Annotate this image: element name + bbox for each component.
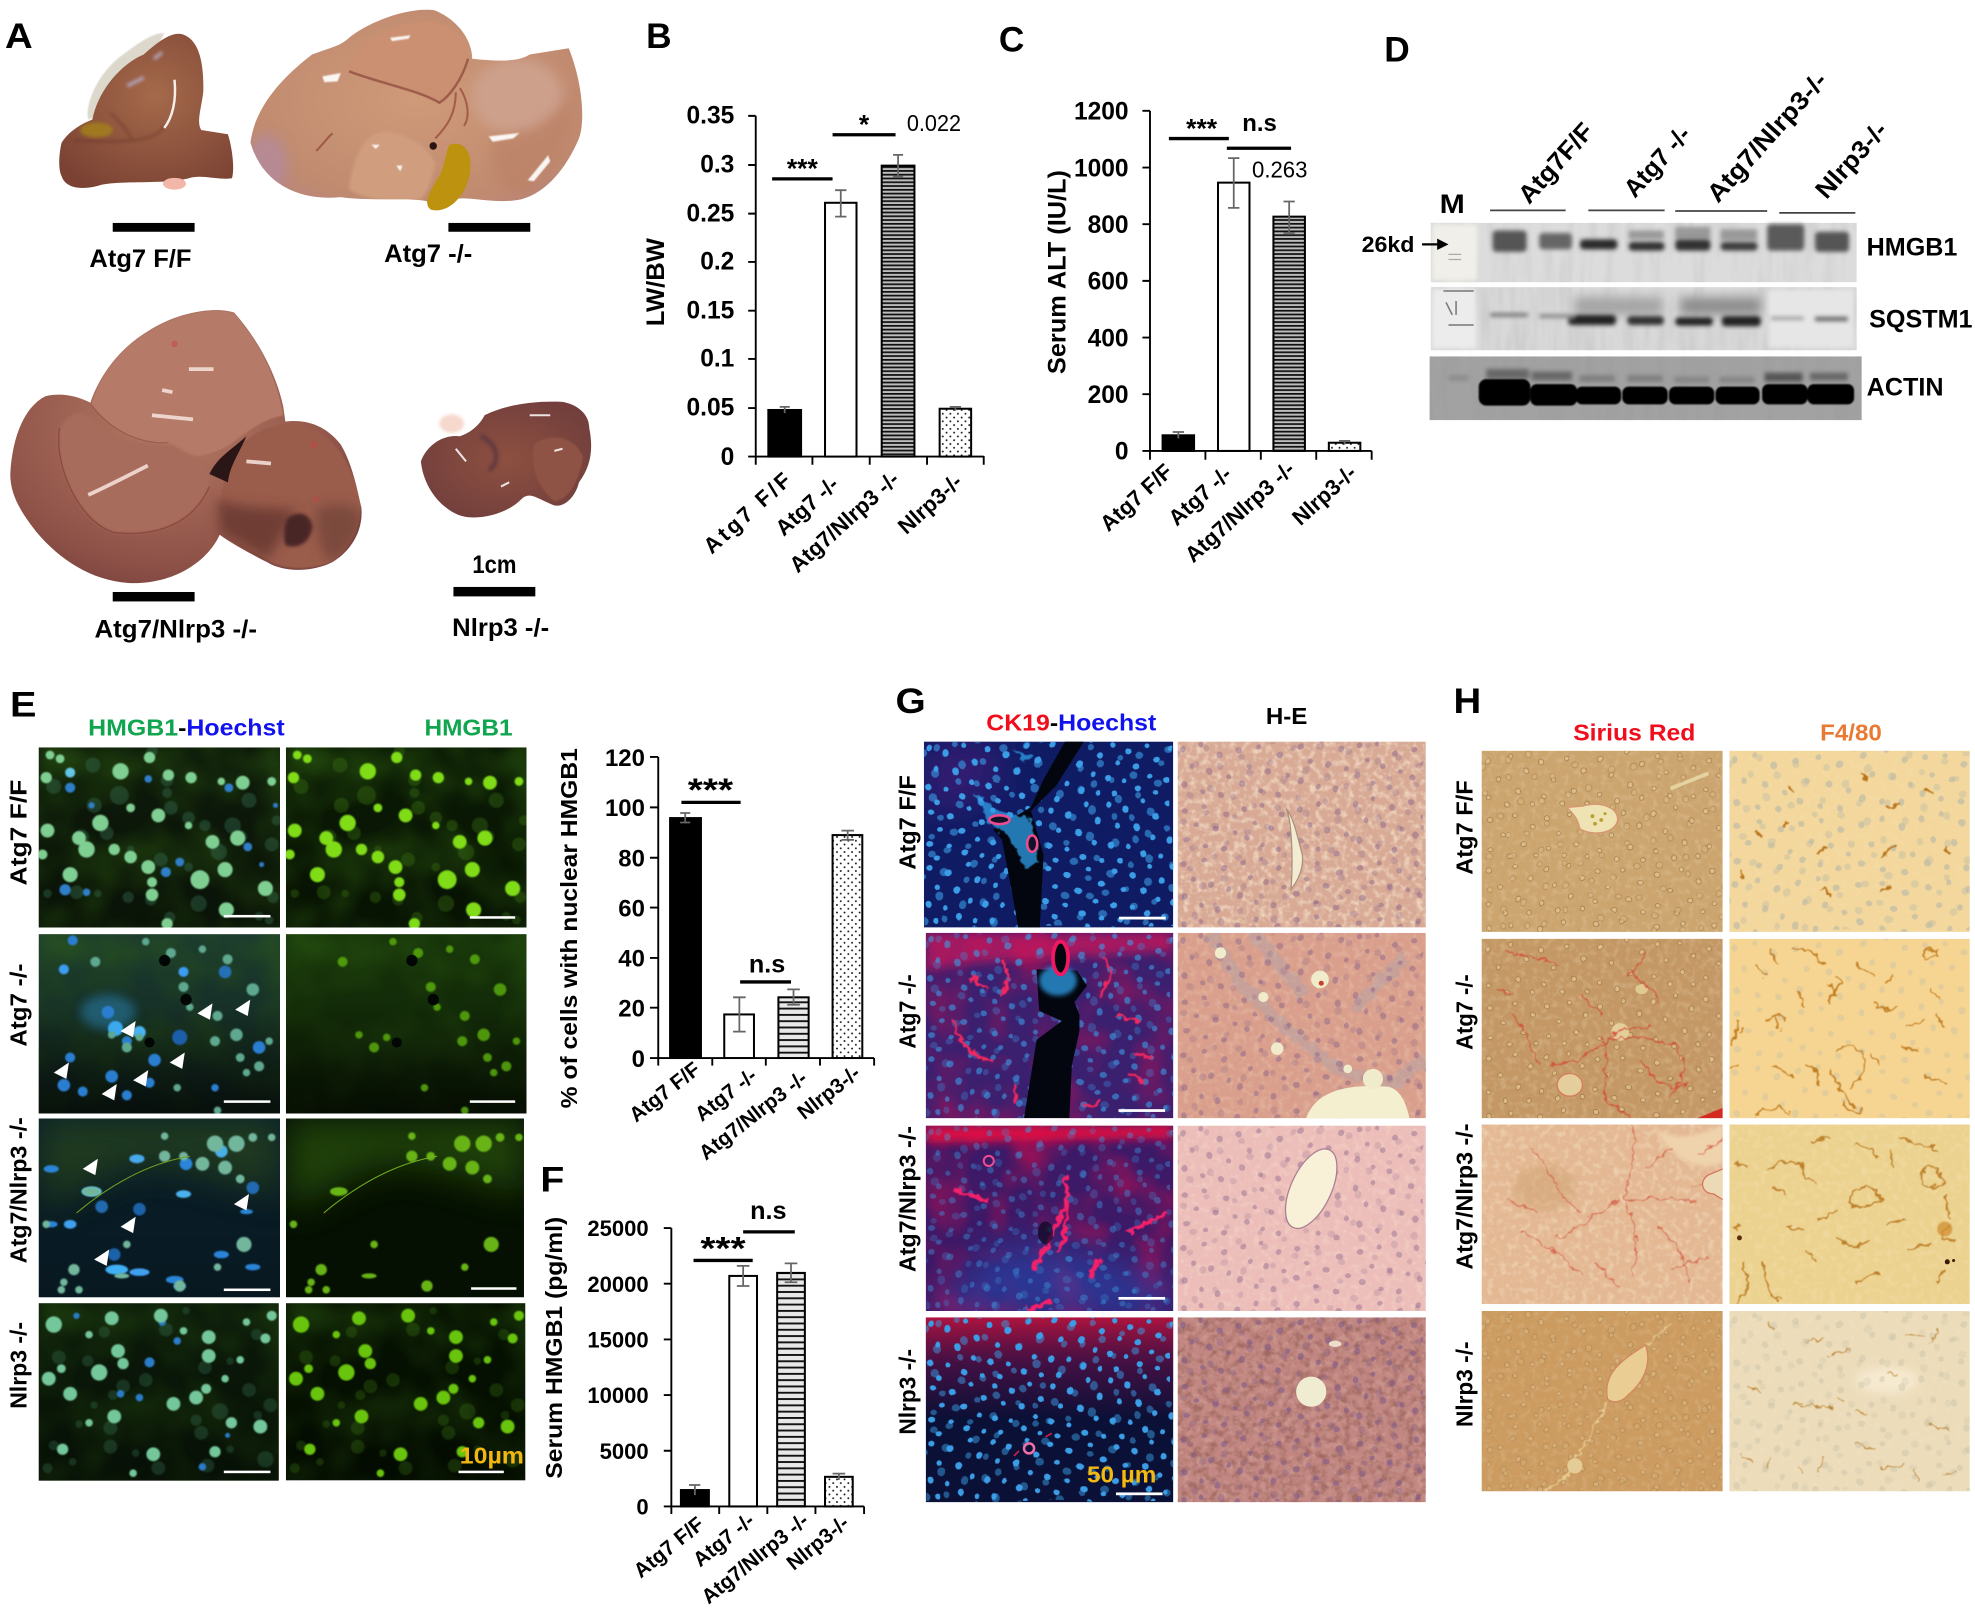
axes (748, 116, 984, 465)
y-axis tick labels: 100 (605, 795, 645, 822)
row labels: Nlrp3 -/- (1451, 1341, 1477, 1427)
blot protein labels (1867, 235, 1972, 401)
panel label E: E (10, 686, 37, 725)
y-axis tick labels: 120 (605, 745, 645, 772)
y-axis tick labels: 10000 (587, 1383, 649, 1408)
row labels: Atg7/Nlrp3 -/- (1451, 1124, 1477, 1270)
axes (650, 757, 874, 1066)
micrograph: F4/80 Atg7/Nlrp3 -/- (1730, 1124, 1970, 1304)
micrograph: green Nlrp3 -/- with scale (286, 1303, 526, 1480)
micrograph: H-E Atg7 -/- (1178, 932, 1426, 1118)
liver photo: Nlrp3 -/- (421, 402, 591, 518)
micrograph: F4/80 Atg7 F/F (1729, 750, 1970, 932)
panel F: Serum HMGB1 bar chart (540, 1161, 864, 1609)
scale bars and labels for bottom row: Nlrp3 -/- (452, 614, 549, 642)
blot: ACTIN (1430, 356, 1862, 420)
y-axis tick labels: 0 (721, 444, 734, 471)
column heading green: HMGB1 (424, 715, 513, 741)
y-axis tick labels: 0 (636, 1495, 649, 1520)
micrograph: F4/80 Atg7 -/- (1730, 938, 1970, 1118)
bars (768, 166, 971, 457)
liver photo: Atg7/Nlrp3 -/- (10, 310, 362, 583)
y-axis title: Serum HMGB1 (pg/ml) (541, 1217, 567, 1479)
micrograph: green Atg7 -/- (286, 934, 526, 1114)
significance marks: * (859, 110, 870, 140)
bar chart: percent nuclear HMGB1 (556, 745, 874, 1165)
y-axis tick labels: 600 (1088, 269, 1129, 296)
panel G: CK19 and H-E histology (895, 682, 1426, 1503)
blot protein labels: ACTIN (1867, 375, 1944, 401)
scale bars and labels for top row: Atg7 F/F (89, 245, 191, 273)
row labels (1451, 780, 1477, 1427)
panel E: HMGB1 immunofluorescence (5, 686, 529, 1481)
error bars (1173, 158, 1350, 445)
row labels: Atg7 F/F (1451, 780, 1477, 875)
x-axis labels: Nlrp3-/- (893, 469, 967, 539)
axes (664, 1228, 864, 1514)
micrograph: CK19 Atg7 -/- (926, 932, 1174, 1118)
group labels: Nlrp3-/- (1810, 116, 1893, 204)
y-axis tick labels: 400 (1088, 325, 1129, 352)
x-axis labels (625, 1058, 865, 1165)
axes (1142, 111, 1372, 460)
row labels (895, 775, 921, 1435)
row labels: Atg7 -/- (1451, 974, 1477, 1050)
group labels: Atg7 -/- (1619, 121, 1697, 203)
significance marks: *** (700, 1230, 746, 1267)
scale bars and labels for bottom row: Atg7/Nlrp3 -/- (94, 615, 257, 643)
blot protein labels: SQSTM1 (1869, 306, 1972, 333)
column heading H-E: H-E (1266, 703, 1307, 729)
y-axis tick labels: 0.3 (700, 152, 734, 179)
y-axis tick labels: 80 (618, 846, 645, 873)
micrograph: H-E Atg7/Nlrp3 -/- (1178, 1126, 1426, 1311)
row labels: Atg7 F/F (5, 779, 31, 885)
significance marks: *** (787, 154, 818, 184)
scale bars and labels for top row: Atg7 -/- (384, 240, 472, 268)
row labels: Atg7 F/F (895, 775, 921, 870)
micrograph: CK19 Atg7 F/F (924, 742, 1174, 928)
panel label D: D (1384, 31, 1410, 70)
x-axis labels (1095, 456, 1361, 567)
micrograph: green Atg7/Nlrp3 -/- (286, 1118, 524, 1298)
micrograph: merged Nlrp3 -/- (38, 1303, 279, 1481)
row labels (5, 779, 31, 1409)
group labels: Atg7/Nlrp3-/- (1702, 67, 1833, 208)
panel D: western blots (1362, 31, 1972, 420)
significance marks: 0.263 (1252, 157, 1307, 183)
micrograph: F4/80 Nlrp3 -/- (1729, 1311, 1970, 1492)
column heading merged: HMGB1 -Hoechst (88, 715, 285, 741)
panel B: LW/BW bar chart (642, 17, 984, 577)
row labels: Nlrp3 -/- (5, 1322, 31, 1409)
panel C: Serum ALT bar chart (999, 21, 1372, 567)
y-axis tick labels: 0 (632, 1046, 645, 1073)
error bars (689, 1263, 845, 1495)
scale bars and labels for top row (89, 223, 530, 273)
x-axis labels: Atg7 F/F (629, 1513, 709, 1583)
y-axis tick labels (605, 745, 645, 1073)
y-axis tick labels: 25000 (587, 1216, 649, 1241)
group labels (1513, 67, 1893, 209)
row labels: Atg7 -/- (895, 974, 921, 1049)
panel label H: H (1454, 682, 1481, 721)
significance marks (772, 110, 961, 184)
bars (1163, 183, 1360, 451)
x-axis labels: Atg7/Nlrp3 -/- (1180, 456, 1299, 567)
panel label F: F (540, 1161, 564, 1200)
scale bars and labels for bottom row: 1cm (472, 551, 516, 579)
liver photo: Atg7 -/- (246, 10, 582, 210)
y-axis tick labels: 5000 (600, 1439, 649, 1464)
marker label: M (1440, 189, 1465, 219)
blot: HMGB1 (1431, 223, 1857, 282)
panel label A: A (5, 17, 33, 56)
panel A: liver photographs (5, 10, 591, 643)
26kd arrow: 26kd (1362, 232, 1414, 257)
micrograph: merged Atg7/Nlrp3 -/- (38, 1118, 280, 1298)
y-axis tick labels: 0.25 (687, 201, 734, 228)
y-axis tick labels: 0.2 (700, 249, 734, 276)
y-axis tick labels (687, 102, 734, 471)
y-axis tick labels: 20 (618, 995, 645, 1022)
group labels: Atg7F/F (1513, 118, 1599, 209)
x-axis labels: Nlrp3-/- (782, 1511, 853, 1575)
micrograph: merged Atg7 -/- (38, 934, 280, 1114)
y-axis title: % of cells with nuclear HMGB1 (556, 748, 582, 1108)
significance marks (694, 1197, 795, 1267)
micrograph: Sirius Atg7 -/- (1482, 938, 1723, 1118)
significance marks: n.s (749, 950, 785, 978)
x-axis labels: Atg7/Nlrp3 -/- (695, 1066, 812, 1165)
y-axis tick labels: 0 (1115, 439, 1129, 466)
x-axis labels: Nlrp3-/- (793, 1061, 865, 1124)
row labels: Atg7/Nlrp3 -/- (5, 1117, 31, 1263)
scale bars and labels for bottom row (94, 551, 549, 643)
micrograph: CK19 Atg7/Nlrp3 -/- (926, 1126, 1174, 1311)
y-axis tick labels (587, 1216, 649, 1520)
panel H: Sirius Red and F4/80 staining (1451, 682, 1971, 1492)
y-axis tick labels: 0.35 (687, 102, 734, 129)
x-axis labels: Atg7/Nlrp3 -/- (697, 1509, 813, 1609)
y-axis tick labels: 1200 (1074, 99, 1129, 126)
micrograph: Sirius Nlrp3 -/- (1482, 1311, 1723, 1492)
x-axis labels: Atg7 -/- (1163, 461, 1236, 531)
y-axis title: Serum ALT (IU/L) (1044, 170, 1072, 374)
x-axis labels: Atg7 F/F (698, 468, 796, 559)
micrograph: Sirius Atg7 F/F (1482, 750, 1723, 932)
y-axis tick labels (1074, 99, 1129, 466)
panel label G: G (896, 682, 926, 721)
blot protein labels: HMGB1 (1867, 235, 1957, 262)
significance marks: n.s (750, 1197, 787, 1225)
x-axis labels: Nlrp3-/- (1287, 460, 1361, 530)
y-axis tick labels: 60 (618, 895, 645, 922)
column heading CK19-Hoechst: CK19 -Hoechst (986, 710, 1157, 736)
micrograph: green Atg7 F/F (286, 747, 526, 928)
panel label C: C (999, 21, 1024, 60)
x-axis labels (629, 1509, 853, 1609)
significance marks (1169, 110, 1307, 183)
micrograph: H-E Atg7 F/F (1178, 742, 1426, 928)
significance marks: 0.022 (907, 110, 961, 136)
error bars (680, 813, 854, 1032)
y-axis tick labels: 800 (1088, 212, 1129, 239)
x-axis labels: Atg7 -/- (691, 1064, 761, 1126)
column heading F4/80: F4/80 (1820, 720, 1882, 746)
group underlines (1490, 210, 1855, 213)
y-axis tick labels: 0.05 (687, 395, 734, 422)
micrograph: H-E Nlrp3 -/- (1178, 1317, 1426, 1502)
x-axis labels (698, 466, 967, 577)
micrograph: Sirius Atg7/Nlrp3 -/- (1482, 1124, 1723, 1304)
micrograph: merged Atg7 F/F (38, 747, 280, 928)
significance marks: n.s (1242, 110, 1277, 137)
error bars (780, 155, 961, 413)
y-axis tick labels: 200 (1088, 382, 1129, 409)
26kd arrow (1362, 232, 1449, 257)
y-axis tick labels: 20000 (587, 1272, 649, 1297)
significance marks: *** (688, 771, 733, 808)
y-axis title: LW/BW (642, 238, 670, 326)
significance marks: *** (1186, 113, 1218, 143)
liver photo: Atg7 F/F (59, 33, 233, 190)
x-axis labels: Atg7 -/- (770, 471, 843, 541)
bars (670, 818, 862, 1058)
y-axis tick labels: 1000 (1074, 155, 1129, 182)
x-axis labels: Atg7 -/- (689, 1509, 759, 1572)
significance marks (681, 771, 791, 982)
micrograph: CK19 Nlrp3 -/- (926, 1317, 1174, 1502)
y-axis tick labels: 0.1 (700, 346, 734, 373)
column heading Sirius Red: Sirius Red (1573, 720, 1695, 746)
x-axis labels: Atg7 F/F (625, 1058, 705, 1127)
scale label 50 um: 50 µm (1087, 1461, 1156, 1487)
y-axis tick labels: 40 (618, 946, 645, 973)
row labels: Atg7/Nlrp3 -/- (895, 1126, 921, 1272)
x-axis labels: Atg7 F/F (1095, 459, 1177, 536)
x-axis labels: Atg7/Nlrp3 -/- (784, 466, 904, 577)
scale label 10 um: 10µm (460, 1443, 524, 1469)
row labels: Nlrp3 -/- (895, 1349, 921, 1435)
bars (681, 1273, 853, 1506)
blot: SQSTM1 (1431, 287, 1857, 350)
y-axis tick labels: 15000 (587, 1328, 649, 1353)
panel label B: B (646, 17, 672, 56)
y-axis tick labels: 0.15 (687, 298, 734, 325)
row labels: Atg7 -/- (5, 964, 31, 1047)
